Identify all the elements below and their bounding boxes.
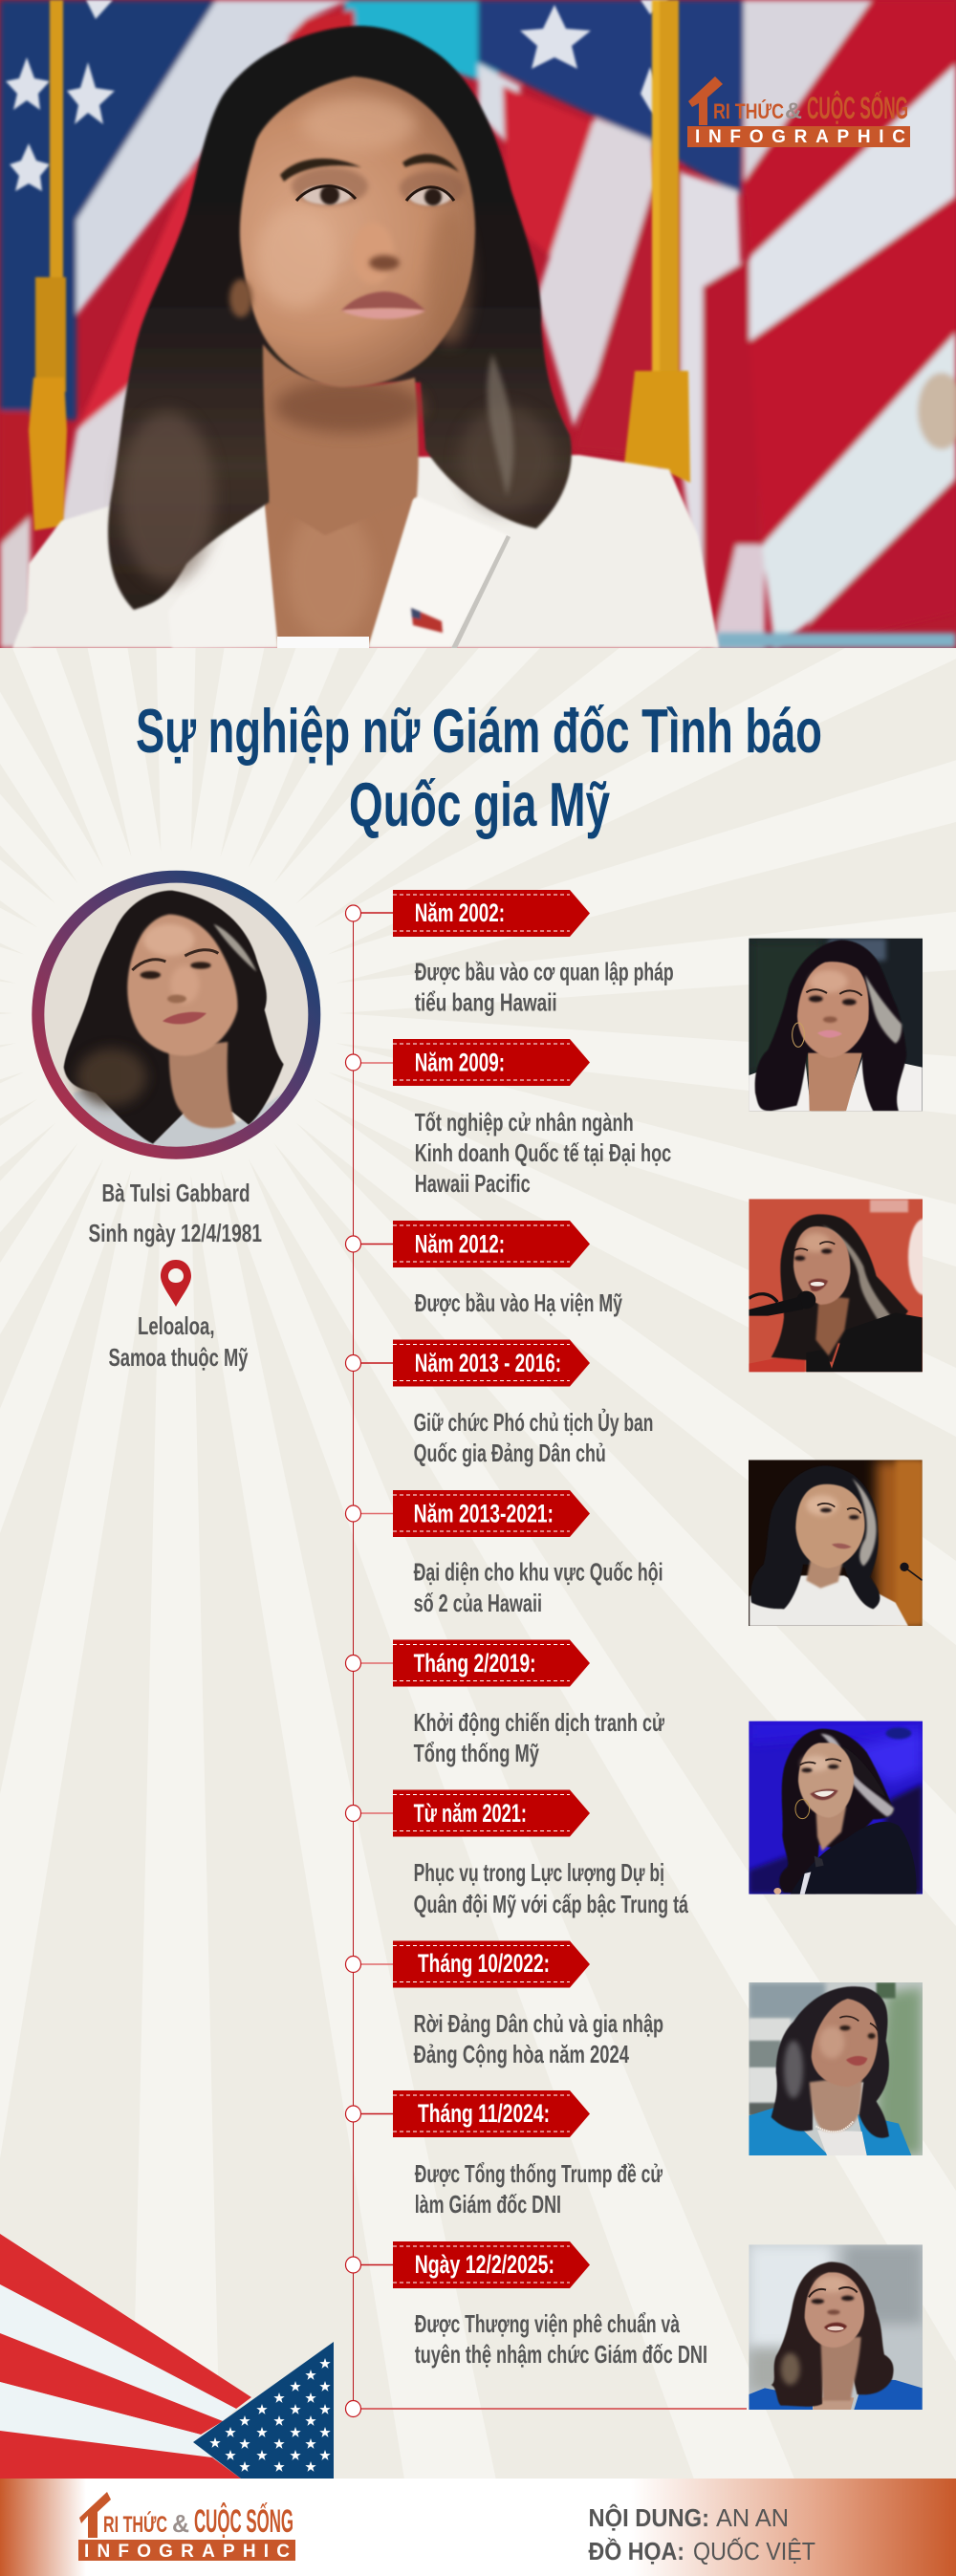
timeline item: Năm 2012	[346, 1221, 622, 1317]
decoration: US flag stripes and stars	[0, 2234, 334, 2479]
timeline item: Năm 2013 - 2016	[346, 1340, 653, 1467]
credits: AN AN	[716, 2503, 789, 2532]
timeline item: Từ năm 2021	[346, 1789, 688, 1918]
profile: name, birth and place	[88, 1179, 262, 1372]
timeline item: Năm 2013-2021	[346, 1490, 663, 1617]
timeline item: Năm 2013 - 2016: Quốc gia Đảng Dân chủ	[414, 1439, 606, 1467]
photo: speaking at microphone on red backdrop	[749, 1199, 940, 1372]
timeline item: Tháng 2/2019	[346, 1640, 664, 1767]
hero photo: woman in white jacket before US flags	[0, 0, 956, 650]
credits: ĐỒ HỌA:	[589, 2537, 684, 2565]
timeline item: Năm 2013 - 2016: Giữ chức Phó chủ tịch Ủy ban	[414, 1407, 653, 1437]
timeline item: Năm 2013-2021: Năm 2013-2021:	[414, 1499, 554, 1527]
timeline item: Tháng 11/2024: Được Tổng thống Trump đề cử	[415, 2159, 663, 2188]
credits: QUỐC VIỆT	[693, 2537, 815, 2565]
timeline item: Từ năm 2021: Quân đội Mỹ với cấp bậc Trung tá	[414, 1890, 688, 1918]
timeline item: Tháng 10/2022	[346, 1940, 663, 2068]
timeline item: Năm 2002: Năm 2002:	[415, 898, 505, 927]
title: Quốc gia Mỹ	[349, 769, 610, 839]
photo: blue jacket with greenery background	[749, 1982, 923, 2155]
photo: dark studio portrait	[749, 939, 923, 1111]
logo: top right brand mark: INFOGRAPHIC	[695, 127, 905, 147]
profile portrait in gradient ring	[32, 871, 320, 1163]
timeline item: Tháng 2/2019: Khởi động chiến dịch tranh cử	[414, 1708, 664, 1737]
footer band	[0, 2479, 956, 2576]
timeline item: Tháng 11/2024: Tháng 11/2024:	[418, 2099, 550, 2128]
profile: name, birth and place: Leloaloa,	[138, 1311, 214, 1340]
timeline item: Năm 2012: Được bầu vào Hạ viện Mỹ	[415, 1288, 622, 1317]
photo: looking up in blue jacket	[749, 2244, 923, 2410]
timeline item: Tháng 2/2019: Tháng 2/2019:	[414, 1649, 535, 1678]
timeline end marker	[346, 2401, 747, 2416]
footer logo: INFOGRAPHIC	[84, 2542, 290, 2562]
timeline item: Năm 2009: Tốt nghiệp cử nhân ngành	[415, 1108, 634, 1136]
timeline item: Ngày 12/2/2025	[346, 2241, 707, 2369]
logo: top right brand mark: &	[785, 98, 802, 124]
timeline item: Ngày 12/2/2025: Được Thượng viện phê chuẩn và	[415, 2309, 680, 2338]
timeline item: Từ năm 2021: Từ năm 2021:	[414, 1799, 527, 1828]
timeline item: Năm 2012: Năm 2012:	[415, 1229, 505, 1258]
timeline item: Từ năm 2021: Phục vụ trong Lực lượng Dự bị	[414, 1858, 664, 1887]
timeline item: Năm 2009: Kinh doanh Quốc tế tại Đại học	[415, 1138, 671, 1167]
photo: white jacket against orange panel	[749, 1460, 924, 1626]
timeline item: Năm 2009	[346, 1039, 671, 1198]
timeline item: Năm 2013-2021: số 2 của Hawaii	[414, 1589, 542, 1617]
woman figure	[12, 26, 719, 648]
timeline item: Năm 2013 - 2016: Năm 2013 - 2016:	[415, 1349, 561, 1377]
timeline item: Năm 2002: tiểu bang Hawaii	[415, 988, 557, 1017]
profile: name, birth and place: Sinh ngày 12/4/1981	[88, 1219, 262, 1247]
timeline spine	[353, 913, 354, 2409]
logo: top right brand mark: RI THỨC	[713, 99, 784, 123]
timeline item: Năm 2009: Năm 2009:	[415, 1048, 505, 1076]
credits	[589, 2503, 815, 2565]
lapel flag pin	[411, 608, 443, 633]
timeline item: Năm 2002: Được bầu vào cơ quan lập pháp	[415, 958, 674, 986]
footer logo: CUỘC SỐNG	[194, 2502, 293, 2540]
timeline item: Tháng 10/2022: Đảng Cộng hòa năm 2024	[414, 2040, 629, 2068]
timeline item: Năm 2002	[346, 890, 674, 1017]
timeline item: Tháng 11/2024	[346, 2090, 663, 2219]
photo: smiling on stage with blue lights	[749, 1721, 923, 1894]
timeline item: Tháng 10/2022: Rời Đảng Dân chủ và gia nhập	[414, 2009, 663, 2038]
footer logo	[78, 2492, 295, 2562]
profile: name, birth and place: Bà Tulsi Gabbard	[101, 1179, 250, 1207]
logo: top right brand mark	[687, 76, 910, 147]
timeline item: Năm 2013-2021: Đại diện cho khu vực Quốc hội	[414, 1558, 663, 1587]
footer logo: &	[172, 2509, 189, 2538]
footer logo: RI THỨC	[103, 2511, 167, 2538]
timeline item: Tháng 11/2024: làm Giám đốc DNI	[415, 2190, 561, 2219]
timeline item: Năm 2009: Hawaii Pacific	[415, 1169, 531, 1198]
title	[136, 696, 822, 839]
timeline item: Ngày 12/2/2025: tuyên thệ nhậm chức Giám đốc DNI	[415, 2340, 707, 2369]
profile: name, birth and place: Samoa thuộc Mỹ	[109, 1343, 249, 1372]
icon: map pin	[161, 1260, 191, 1307]
timeline item: Tháng 2/2019: Tổng thống Mỹ	[414, 1739, 539, 1767]
timeline item: Ngày 12/2/2025: Ngày 12/2/2025:	[415, 2250, 554, 2279]
timeline item: Tháng 10/2022: Tháng 10/2022:	[418, 1949, 550, 1978]
credits: NỘI DUNG:	[589, 2503, 709, 2532]
